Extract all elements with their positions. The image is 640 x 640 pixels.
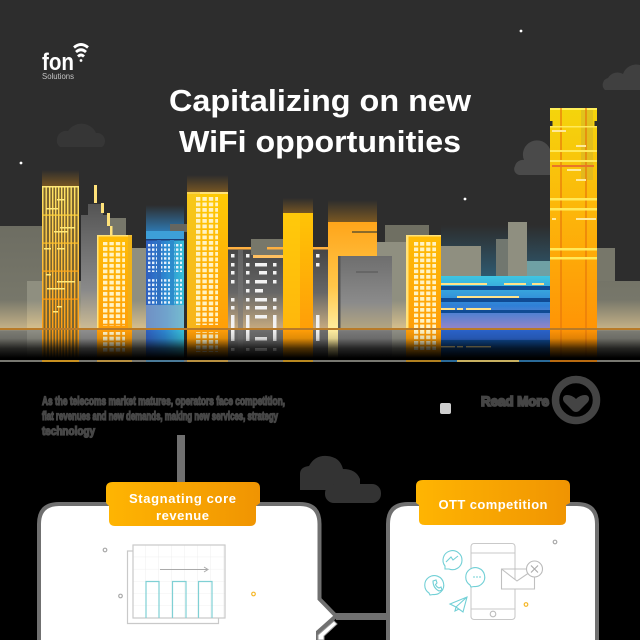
lower black background: [0, 362, 640, 640]
arrow notch highlight: [318, 621, 337, 640]
stars: [20, 30, 522, 200]
logo: fon Solutions: [42, 44, 88, 81]
city skyline: [0, 108, 640, 362]
waterline strip: [0, 360, 640, 362]
tall orange tower: [550, 108, 597, 360]
orange tall building with windows: [187, 192, 228, 360]
panel: stagnating core revenue: [39, 482, 337, 640]
water reflection: [0, 328, 640, 360]
cloud: top right: [603, 64, 640, 90]
logo: fon Solutions: Solutions: [42, 71, 74, 81]
intro text block: [42, 396, 285, 438]
connector line to first card: [177, 435, 185, 483]
cloud: beside tower: [514, 140, 550, 175]
decorative dots: [524, 540, 557, 606]
dark sky hero background: [0, 0, 640, 361]
intro text block: As the telecoms market matures, operators face competition,: [42, 396, 285, 408]
title: Capitalizing on new: [169, 83, 472, 118]
orange and grey block pair: [328, 222, 392, 360]
building glows: [42, 170, 550, 277]
title: [169, 83, 472, 159]
icon: bar chart: [128, 545, 225, 624]
intro text block: flat revenues and new demands, making new services, strategy: [42, 411, 278, 423]
cloud: upper left: [57, 124, 105, 147]
read more call to action: [481, 380, 596, 420]
heading tag: [106, 482, 260, 526]
logo: fon Solutions: fon: [42, 49, 74, 76]
blue building with windows: [146, 231, 184, 360]
card body with arrow: [39, 504, 336, 640]
yellow diagonal antenna steps: [94, 185, 112, 235]
cloud: dark on black: [300, 456, 381, 503]
blue striped low building: [441, 276, 550, 360]
wire-frame yellow building: [42, 186, 79, 360]
orange building with windows, left: [97, 235, 132, 360]
decorative dots: [103, 548, 255, 598]
orange building, centre: [283, 213, 328, 360]
heading tag: [416, 480, 570, 525]
background grey buildings: [0, 218, 640, 360]
intro text block: technology: [42, 426, 96, 438]
small square marker: [440, 403, 451, 414]
heading tag: OTT competition: [438, 497, 548, 512]
read more call to action: Read More: [481, 393, 549, 409]
icon: phone with message apps: [425, 544, 542, 620]
orange building with windows, right: [406, 235, 441, 360]
dark building with white windows: [228, 239, 283, 360]
connector between cards: [336, 613, 388, 620]
icon: wifi: [74, 44, 88, 61]
card body: [388, 504, 597, 640]
icon: circled down heart: [556, 380, 596, 420]
title: WiFi opportunities: [179, 124, 461, 159]
panel: OTT competition: [388, 480, 597, 640]
stepped grey tower: [81, 185, 112, 362]
heading tag: Stagnating core: [129, 491, 236, 506]
heading tag: revenue: [156, 508, 209, 523]
